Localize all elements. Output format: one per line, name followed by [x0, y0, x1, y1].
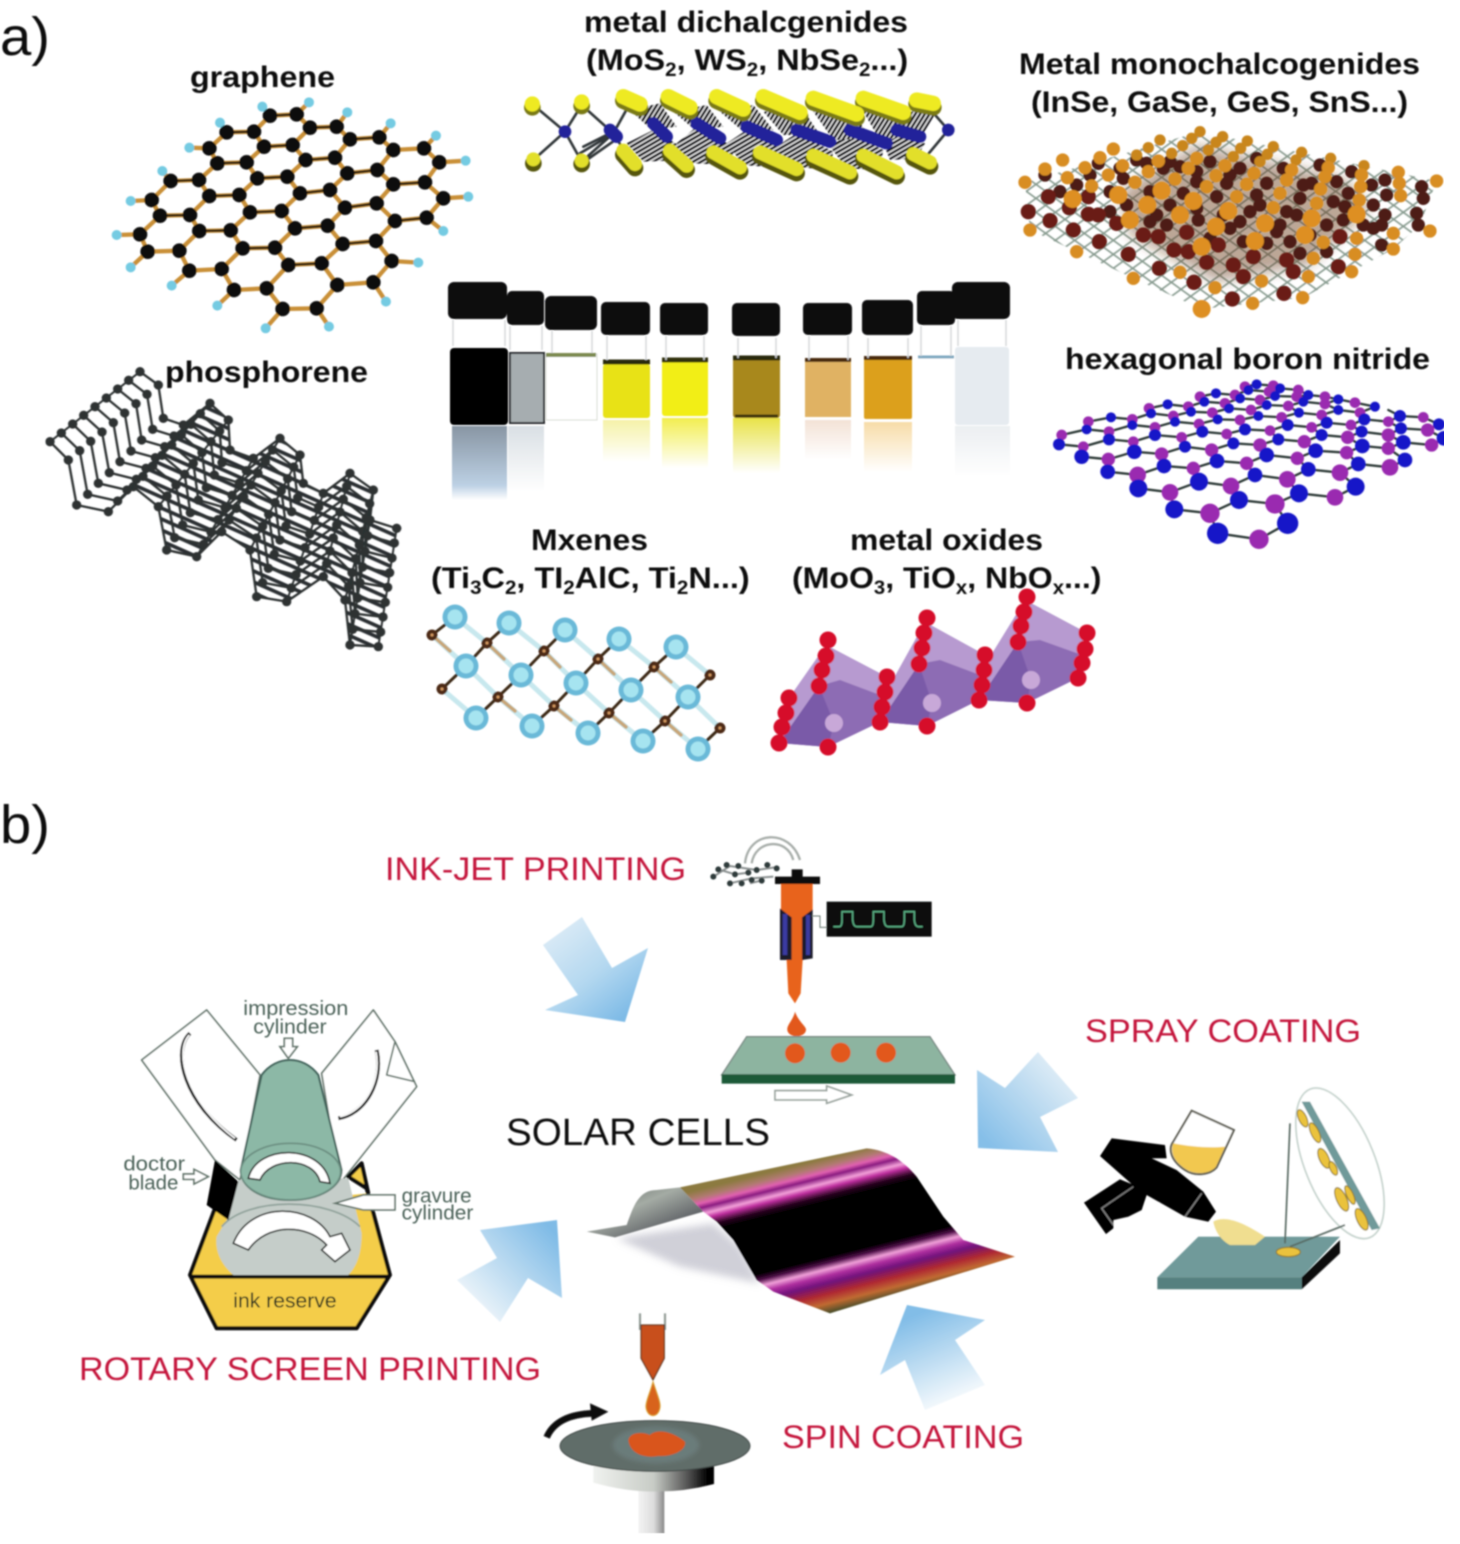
heading: metal oxides: , TiO	[885, 561, 956, 595]
vial caps	[448, 282, 1010, 336]
heading: metal oxides: , NbO	[967, 561, 1053, 595]
label gravure cylinder	[402, 1185, 473, 1224]
heading: metal dichalcogenides: ...)	[870, 43, 908, 77]
molecule: phosphorene puckered layer	[50, 372, 397, 647]
front face with stripes	[680, 1148, 1015, 1313]
label: ink-jet printing: INK-JET PRINTING	[385, 851, 686, 887]
heading: metal monochalcogenides: Metal monochalcogenides	[1019, 48, 1420, 81]
diagram: spin coater	[547, 1313, 750, 1533]
hBN blue atoms	[1218, 523, 1288, 533]
heading: Mxenes: (Ti	[431, 561, 470, 595]
substrate	[722, 1037, 955, 1075]
heading: metal oxides: metal oxides	[850, 524, 1043, 557]
pulse generator	[827, 902, 932, 937]
molecule: MXene lattice	[432, 617, 720, 749]
heading: graphene: graphene	[190, 61, 335, 94]
oxygen atoms	[779, 597, 1087, 747]
heading: metal oxides: x	[1053, 578, 1064, 599]
heading: metal oxides: x	[956, 578, 967, 599]
doctor blade	[207, 1160, 238, 1220]
heading: Mxenes: 2	[505, 578, 516, 599]
gravure cylinder	[216, 1178, 362, 1275]
panel b: printing techniques for solar cells	[0, 795, 1402, 1533]
magnified lens and wire	[1278, 1076, 1402, 1251]
MXene brown atoms	[432, 635, 720, 728]
photo: ten vials of 2D material dispersions	[448, 282, 1010, 500]
panel a: 2D material families	[0, 6, 1444, 749]
heading: metal dichalcogenides	[584, 6, 908, 81]
metal atoms	[565, 123, 948, 143]
pipette	[640, 1313, 665, 1330]
heading: metal monochalcogenides	[1019, 48, 1420, 119]
illustration: flexible solar cell	[587, 1148, 1015, 1313]
gravure rotation arrow	[233, 1211, 350, 1262]
molecule: metal oxide octahedra	[779, 597, 1087, 747]
heading: metal oxides: 3	[874, 578, 885, 599]
chalcogen atoms, yellow highlights	[533, 151, 930, 172]
label impression cylinder: impression	[243, 997, 348, 1020]
heading: metal monochalcogenides: (InSe, GaSe, GeS, SnS...)	[1031, 86, 1408, 119]
title: solar cells: SOLAR CELLS	[506, 1112, 770, 1154]
heading: Mxenes: 3	[470, 578, 482, 599]
arrow: spray coating to solar cells	[977, 1052, 1078, 1152]
back underside	[587, 1187, 703, 1237]
heading: Mxenes: AlC, Ti	[575, 561, 677, 595]
paint cup	[1171, 1111, 1234, 1174]
spray plume	[1213, 1219, 1265, 1245]
heading: metal dichalcogenides: 2	[747, 60, 758, 81]
label gravure cylinder: cylinder	[402, 1201, 473, 1224]
heading: metal dichalcogenides: metal dichalcgenides	[584, 6, 908, 39]
heading: metal oxides	[792, 524, 1101, 599]
spinning disk	[560, 1421, 750, 1471]
paper sheets	[142, 1010, 417, 1183]
bonds of the dichalcogenide layer	[533, 103, 948, 170]
dense hatching of stacked bonds	[133, 403, 397, 647]
heading: Mxenes	[431, 524, 750, 599]
heading: Mxenes: 2	[563, 578, 575, 599]
heading: Mxenes: N...)	[688, 561, 750, 595]
soft shadow	[617, 1223, 760, 1283]
chuck	[593, 1465, 714, 1492]
label doctor blade	[123, 1153, 185, 1194]
reflections of the vials	[452, 418, 1010, 500]
vial liquids	[450, 347, 1009, 425]
motion arrow	[775, 1086, 852, 1103]
heading: metal dichalcogenides: , WS	[677, 43, 747, 77]
heading: metal dichalcogenides: , NbSe	[758, 43, 859, 77]
heading: metal oxides: (MoO	[792, 561, 874, 595]
label impression cylinder	[243, 997, 348, 1038]
ink puddle	[628, 1432, 685, 1457]
molecule: metal dichalcogenide layer	[532, 97, 948, 176]
falling droplet	[787, 1012, 806, 1036]
diagram: rotary screen gravure printing	[123, 997, 473, 1328]
tray label: ink reserve	[233, 1289, 337, 1312]
label: rotary screen printing: ROTARY SCREEN PRINTING	[79, 1351, 541, 1387]
heading: Mxenes: , TI	[516, 561, 563, 595]
label: spin coating: SPIN COATING	[782, 1419, 1024, 1455]
heading: metal dichalcogenides: 2	[859, 60, 870, 81]
diagram: spray gun	[1084, 1076, 1402, 1289]
arrow: ink-jet to solar cells	[543, 917, 648, 1022]
arrow: spin coating to solar cells	[880, 1305, 985, 1410]
heading: Mxenes: C	[482, 561, 505, 595]
heading: Mxenes: Mxenes	[531, 524, 648, 557]
glass necks	[453, 320, 1006, 360]
callout arrows	[183, 1038, 395, 1210]
heading: metal dichalcogenides: (MoS	[586, 43, 665, 77]
rotation arrow	[547, 1413, 593, 1437]
curved sheet arrows	[182, 1033, 378, 1140]
nozzle body	[781, 883, 813, 1003]
heading: Mxenes: 2	[677, 578, 688, 599]
label gravure cylinder: gravure	[402, 1185, 472, 1208]
dots on the substrate	[1276, 1108, 1371, 1257]
hBN purple atoms	[1210, 504, 1275, 539]
deposited drops	[795, 1023, 886, 1083]
molecule: hexagonal boron nitride lattice	[1059, 384, 1444, 539]
label impression cylinder: cylinder	[253, 1015, 327, 1038]
graphene flake	[713, 866, 775, 883]
MXene blue atoms	[455, 617, 698, 749]
substrate block	[1157, 1237, 1340, 1277]
heading: hexagonal boron nitride: hexagonal boron nitride	[1065, 343, 1430, 376]
impression cylinder	[241, 1060, 342, 1200]
chalcogen atoms, lower row	[533, 155, 930, 176]
label: spray coating: SPRAY COATING	[1085, 1013, 1361, 1049]
molecule: graphene lattice	[117, 102, 468, 328]
panel label b: b)	[0, 795, 50, 855]
gun silhouette	[1084, 1138, 1216, 1234]
label doctor blade: blade	[128, 1171, 178, 1194]
label doctor blade: doctor	[123, 1153, 185, 1176]
panel label a: a)	[0, 7, 50, 67]
metal centres	[834, 680, 1031, 723]
molecule: metal monochalcogenide lattice	[1025, 132, 1437, 309]
heading: metal dichalcogenides: 2	[665, 60, 677, 81]
arrow: rotary printing to solar cells	[457, 1220, 562, 1322]
shaft	[638, 1490, 664, 1533]
diagram: ink-jet printer	[713, 837, 955, 1103]
heading: phosphorene: phosphorene	[165, 356, 368, 389]
loop arrow	[745, 837, 800, 863]
heading: metal oxides: ...)	[1064, 561, 1101, 595]
yellow ink tray	[190, 1163, 390, 1328]
rails between chains	[50, 372, 397, 647]
dark central mass	[1120, 145, 1370, 282]
hBN bonds	[1059, 384, 1444, 539]
